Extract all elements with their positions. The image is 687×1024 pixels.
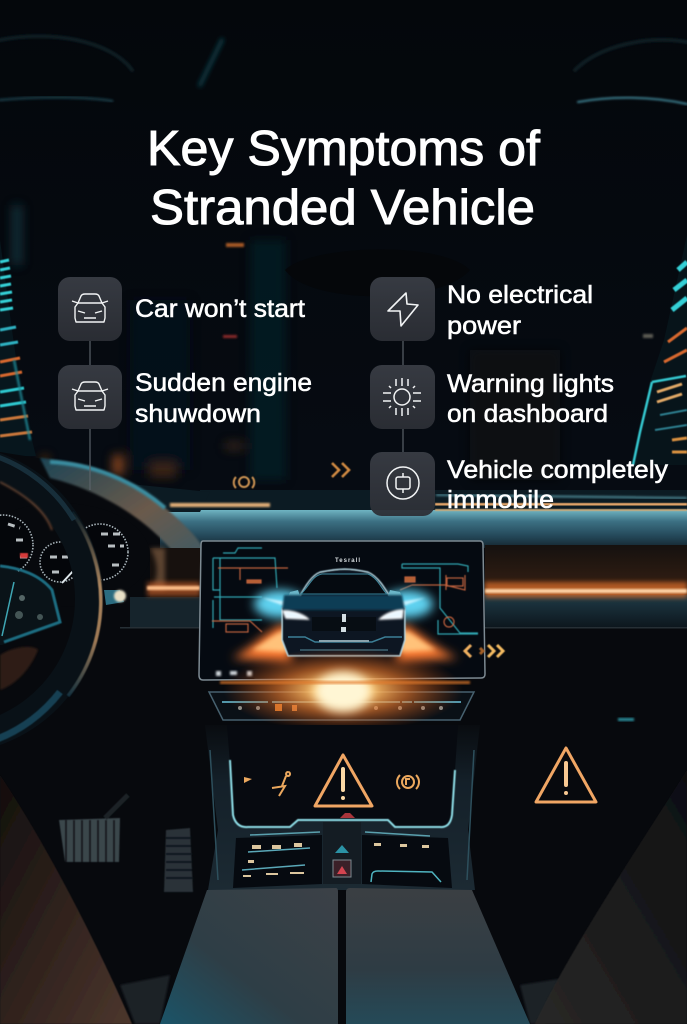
symptom: warning lights on dashboard (370, 365, 614, 429)
symptom: car won't start: Car won’t start (135, 295, 305, 323)
seat right (535, 770, 687, 1024)
side warning triangle (536, 748, 596, 802)
icon: car outline (72, 382, 108, 410)
symptom: no electrical power: power (447, 312, 521, 340)
ceiling and mirror silhouettes (0, 36, 687, 296)
steering wheel (0, 455, 126, 741)
pedals (59, 795, 193, 892)
icon: warning light (383, 378, 421, 416)
central touchscreen (199, 541, 485, 680)
icon: lightning bolt (388, 293, 418, 326)
icon: car (72, 294, 108, 322)
armrest right (346, 888, 530, 1024)
symptom: sudden engine shutdown (58, 365, 312, 429)
armrest left (160, 888, 338, 1024)
neon building left (0, 240, 36, 456)
glow behind car (232, 590, 458, 662)
chevrons on screen edge (465, 645, 503, 657)
icon: immobile indicator (387, 467, 419, 499)
symptom: sudden engine shutdown: shuwdown (135, 400, 261, 428)
symptom: warning lights on dashboard: on dashboard (447, 400, 608, 428)
symptom: vehicle completely immobile (370, 452, 669, 516)
car on screen (282, 569, 405, 656)
screen header label: Tesrall (335, 558, 360, 564)
symptom: vehicle completely immobile: Vehicle completely (447, 456, 669, 484)
title: Key Symptoms of (147, 122, 540, 176)
console seat and brake icons (244, 772, 419, 796)
seat left (0, 775, 132, 1024)
connector lines (90, 341, 403, 490)
screen orange lines (212, 568, 465, 632)
center console recess (205, 725, 480, 890)
symptom: no electrical power (370, 277, 593, 341)
floor rails beside armrests (120, 975, 565, 1024)
instrument cluster gauges (0, 503, 150, 607)
symptom: warning lights on dashboard: Warning lights (447, 370, 614, 398)
lower console touch panels (233, 822, 452, 888)
screen bottom icons (216, 671, 252, 676)
control strip (209, 692, 474, 720)
symptom: car won't start (58, 277, 305, 341)
dashboard (0, 452, 687, 1024)
symptom: no electrical power: No electrical (447, 281, 593, 309)
symptom: sudden engine shutdown: Sudden engine (135, 369, 312, 397)
title: Stranded Vehicle (150, 181, 535, 235)
neon building right (633, 235, 687, 465)
screen diagram lines (213, 548, 478, 634)
orange flare (220, 648, 470, 732)
title (147, 122, 540, 235)
dash icons: parking brake and chevrons (234, 463, 349, 488)
symptom: vehicle completely immobile: immobile (447, 486, 554, 514)
console warning triangle (315, 755, 372, 806)
